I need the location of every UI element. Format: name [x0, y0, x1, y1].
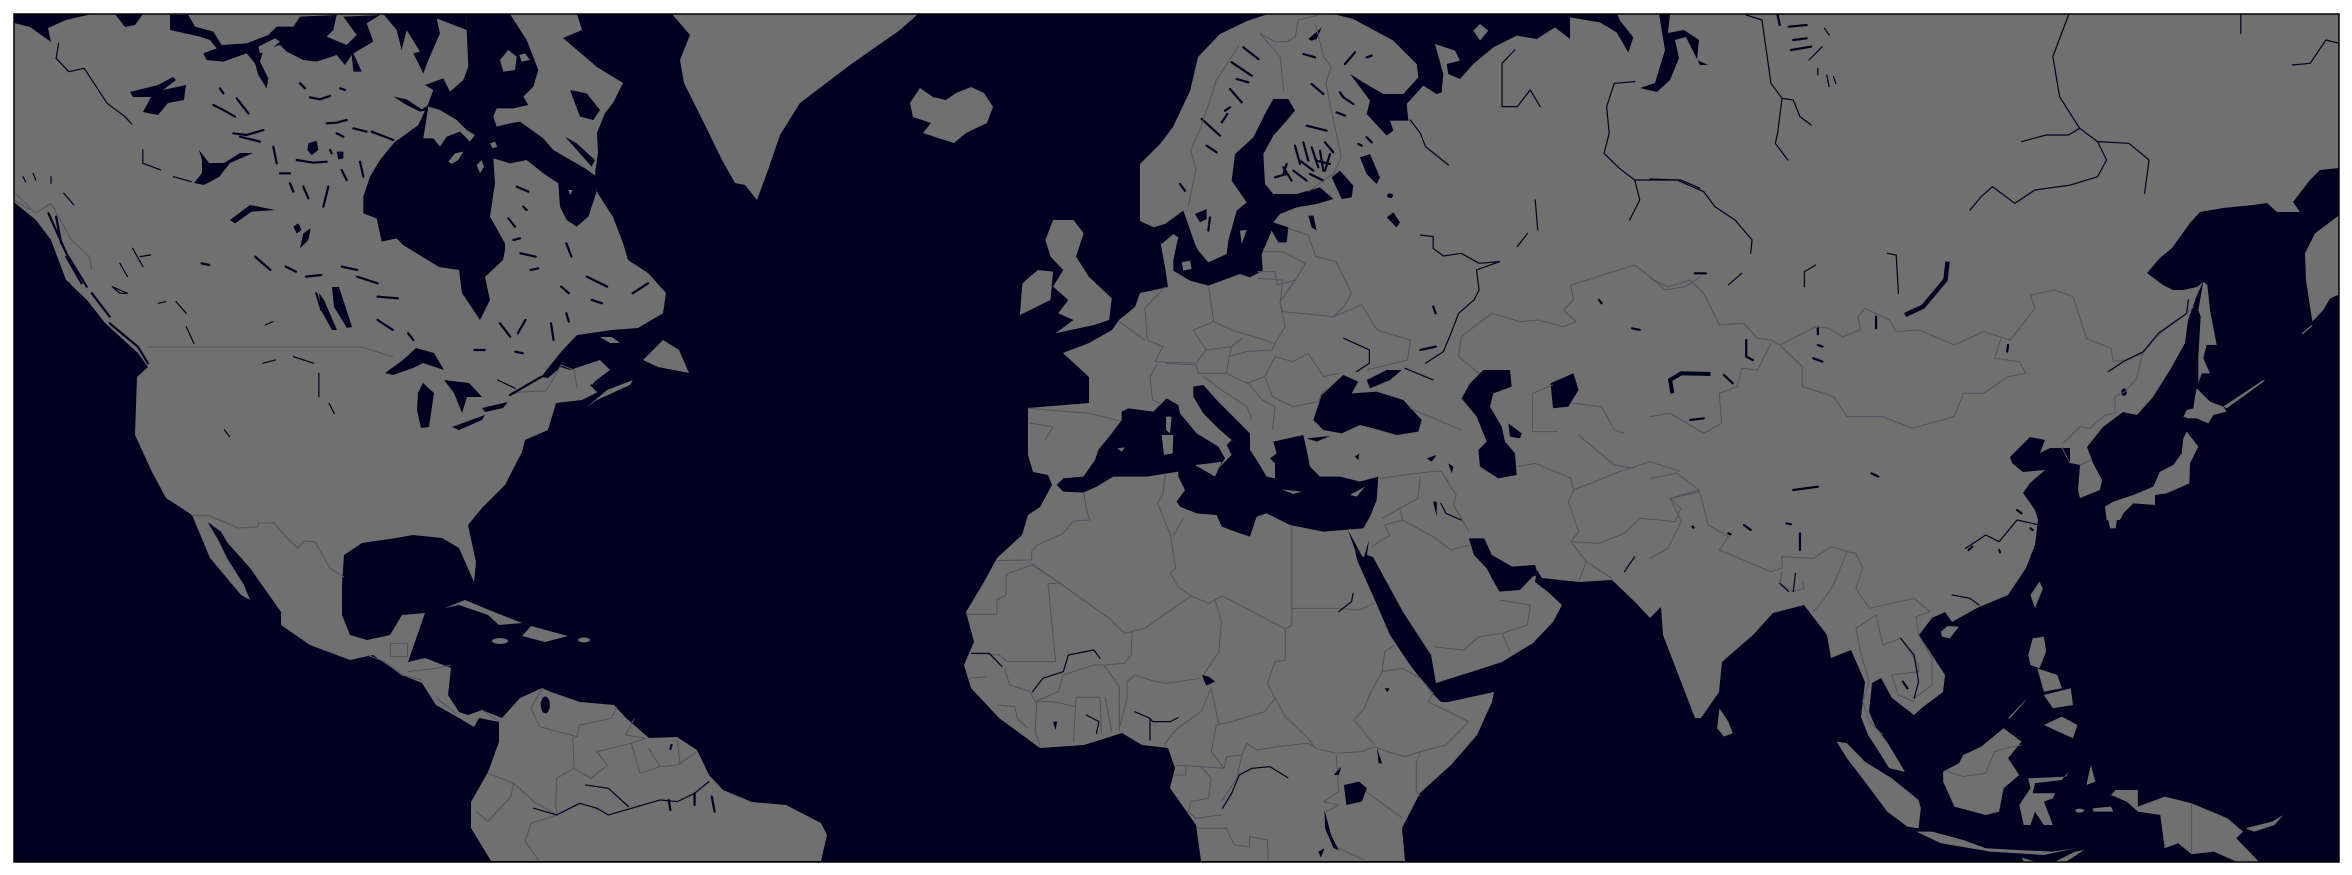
water: Canadian Arctic, Foxe Basin and Hudson Bay — [170, 14, 600, 320]
rivers and lakes: Siberia and central Asia — [1650, 15, 2339, 433]
landmass: Britain and Ireland — [1020, 220, 1112, 333]
landmass: Eurasia and Africa — [964, 14, 2339, 861]
water: Arctic channels of Canada — [14, 14, 143, 42]
landmass: Greenland — [672, 14, 918, 200]
lakes: North America — [130, 77, 508, 430]
rivers and small lakes: southern Canada and United States — [56, 43, 648, 437]
water: Barents, White and Kara seas, Baltic Sea and Scandinavian lakes — [1153, 12, 1633, 286]
borders and rivers: Central and South America — [208, 522, 715, 862]
borders and rivers: Africa and Middle East — [966, 435, 1700, 862]
landmass: Taiwan and Southeast Asia islands — [1717, 513, 2283, 862]
borders: North America — [148, 347, 577, 577]
water: Persian Gulf — [1469, 538, 1538, 592]
landmass: Iceland — [910, 87, 993, 143]
borders and lakes: South and East Asia — [1650, 473, 2192, 854]
landmass: Atlantic Canada islands — [582, 337, 689, 407]
Caribbean islands — [445, 600, 590, 644]
lakes: northern Canada and Quebec — [213, 83, 573, 248]
borders and rivers: Europe — [1028, 15, 1700, 440]
landmass: Sakhalin, Kamchatka, Hokkaido, Honshu and Kuril islands — [2062, 213, 2342, 520]
water: Gulf of St Lawrence — [542, 313, 663, 392]
landmass: Arctic and Hudson Bay islands — [258, 38, 530, 173]
water: Aral Sea — [1551, 373, 1579, 408]
landmass: the Americas — [14, 14, 827, 861]
rivers and lakes: Alaska panhandle and British Columbia fjords — [14, 173, 148, 363]
water: Gulf of Ob — [1640, 14, 1708, 92]
water: Mediterranean, Black, Azov and Caspian seas — [1057, 370, 1522, 537]
